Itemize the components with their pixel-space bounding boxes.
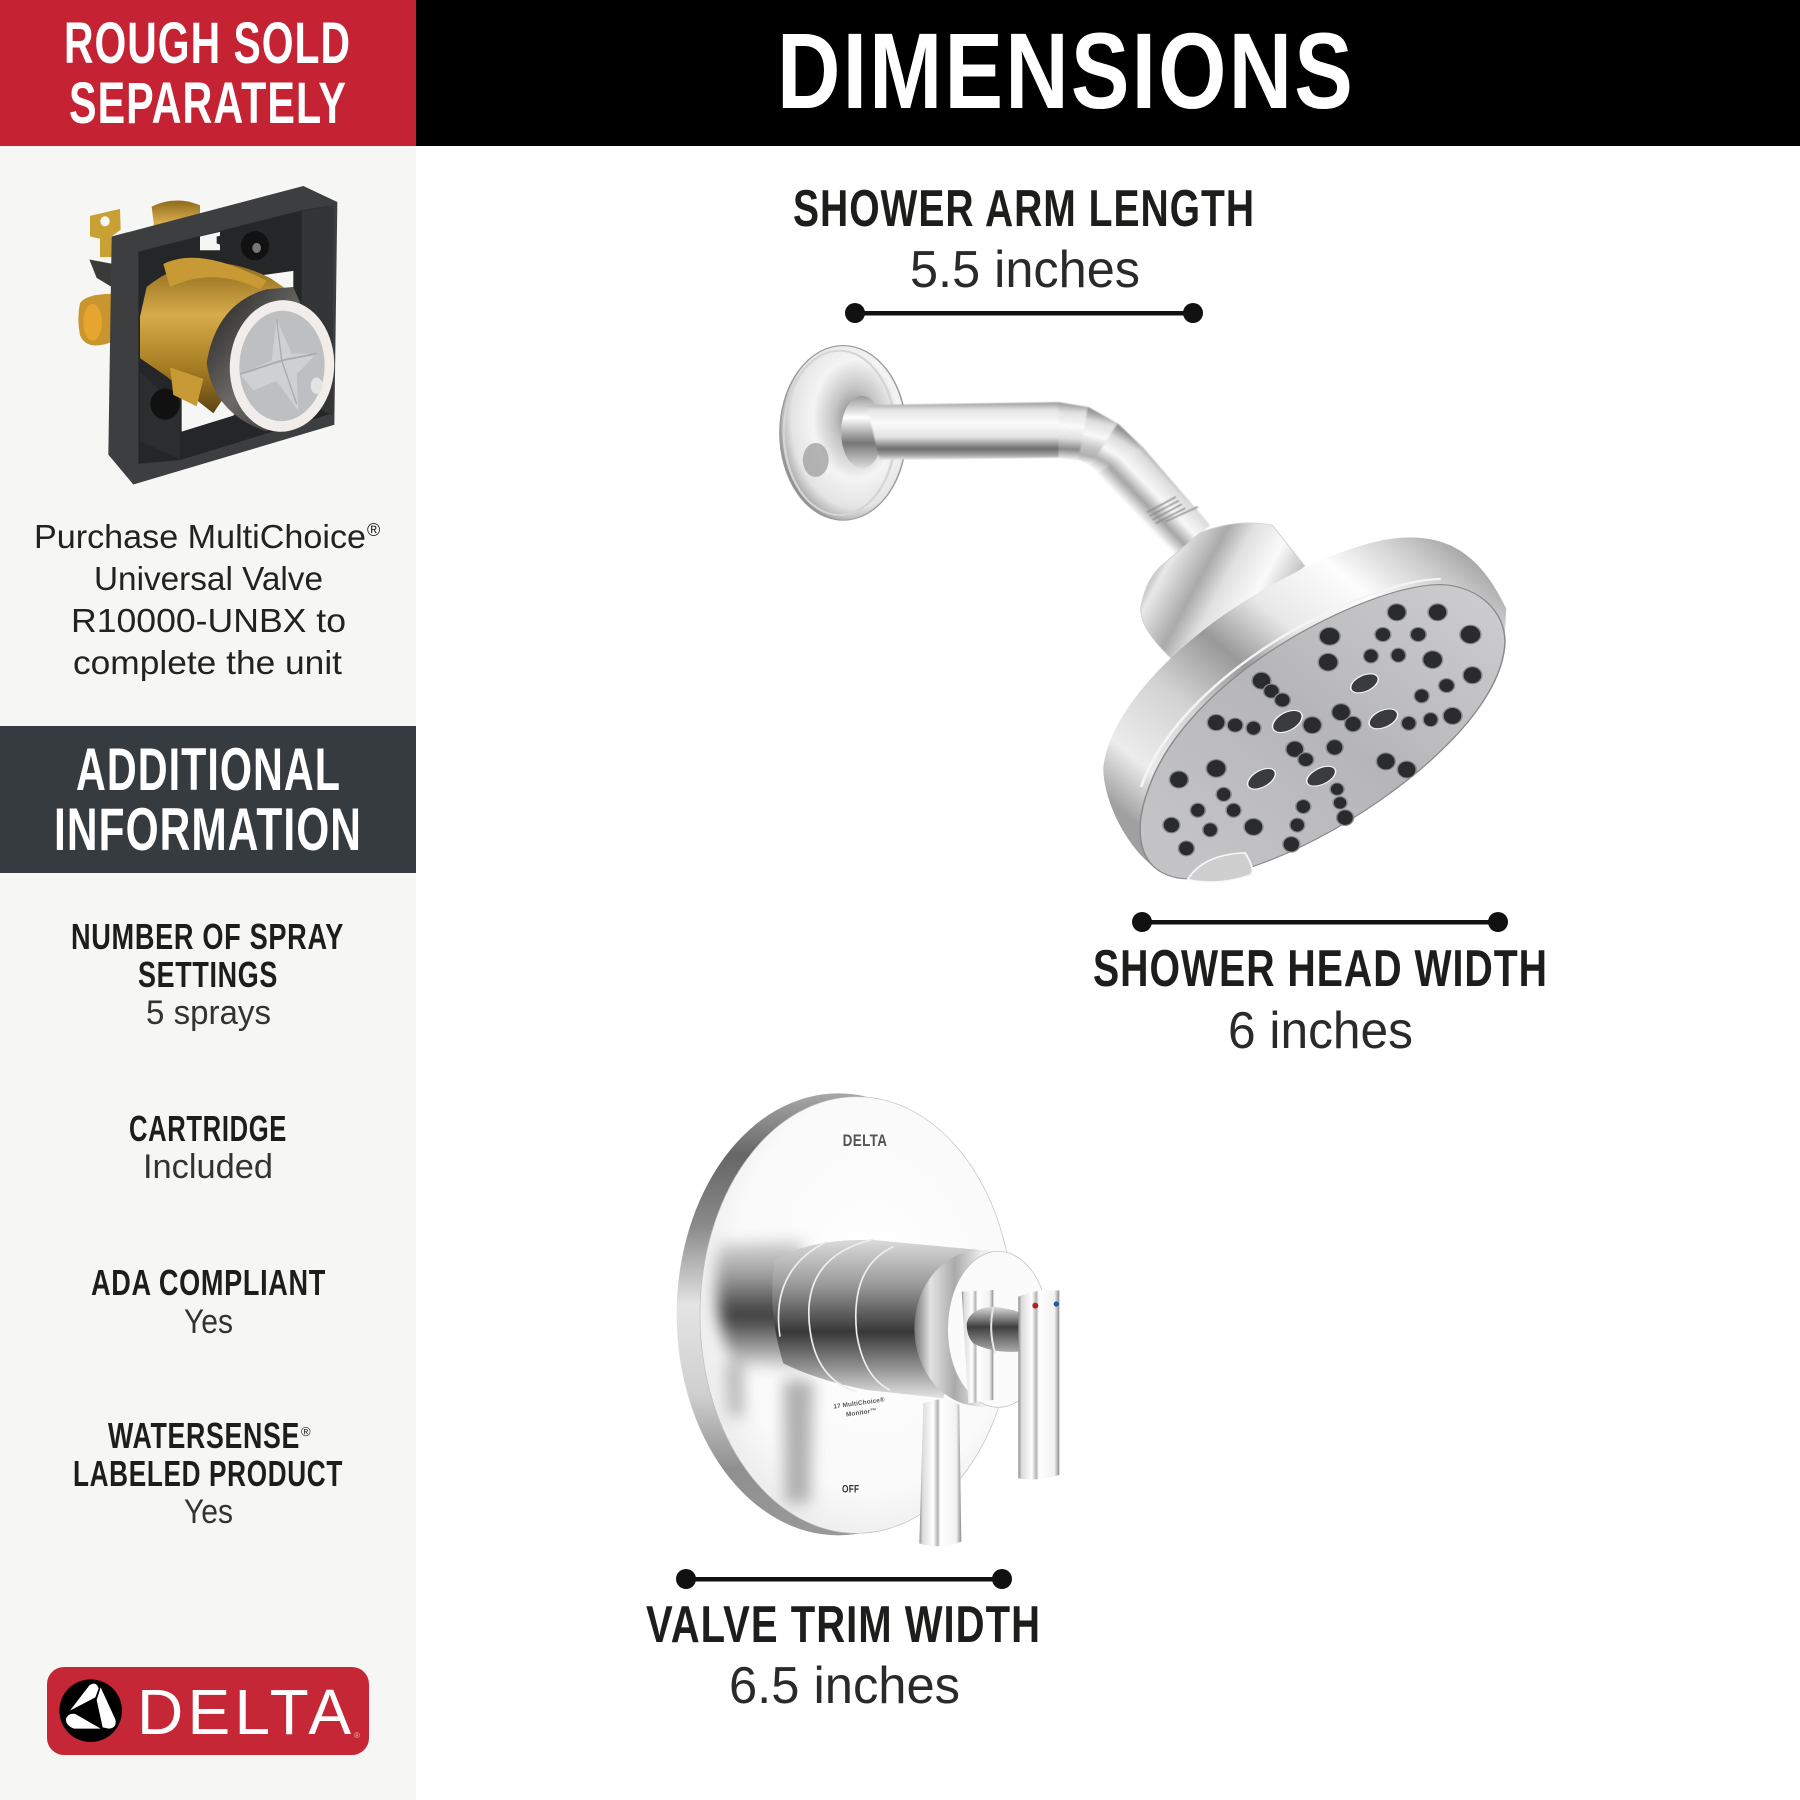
product: shower arm and head	[780, 346, 1506, 882]
label: shower arm length	[793, 180, 1255, 299]
plate text: DELTA	[843, 1131, 887, 1150]
banner: additional information	[0, 726, 416, 873]
label: shower head width: SHOWER HEAD WIDTH	[1093, 940, 1548, 998]
banner: rough sold separately: SEPARATELY	[69, 71, 347, 136]
banner: rough sold separately	[0, 0, 416, 146]
spec: watersense labeled product: ®	[301, 1424, 311, 1439]
spec: watersense labeled product: Yes	[184, 1493, 233, 1531]
spec: number of spray settings: 5 sprays	[146, 994, 271, 1032]
spec: number of spray settings: SETTINGS	[138, 954, 278, 995]
text block: valve purchase note: R10000-UNBX to	[71, 602, 346, 639]
stem and rear bar	[962, 1290, 1020, 1403]
spec: watersense labeled product: WATERSENSE	[108, 1415, 300, 1456]
trim plate rim	[677, 1093, 1000, 1535]
banner: rough sold separately: ROUGH SOLD	[64, 11, 351, 76]
plate reflections	[716, 1240, 813, 1503]
label: valve trim width	[646, 1596, 1041, 1715]
wall flange	[780, 346, 906, 520]
label: shower arm length: SHOWER ARM LENGTH	[793, 180, 1255, 238]
panel: left sidebar background	[0, 0, 416, 1800]
label: valve trim width: 6.5 inches	[729, 1657, 960, 1715]
end cap	[914, 1250, 1049, 1407]
arrow: shower arm length dimension line	[845, 303, 1203, 323]
plate text: OFF	[842, 1484, 859, 1496]
spec: watersense labeled product	[73, 1415, 343, 1531]
head side band	[1103, 538, 1506, 877]
spec: ada compliant: Yes	[184, 1303, 233, 1341]
logo: delta: ®	[354, 1731, 360, 1740]
bottom lever	[919, 1400, 961, 1546]
spray nozzles	[1163, 604, 1482, 856]
valve body cylinder	[772, 1239, 980, 1398]
spec: ada compliant: ADA COMPLIANT	[91, 1262, 326, 1303]
text block: valve purchase note: Purchase MultiChoice	[34, 518, 366, 555]
plate text: 17 MultiChoice®	[833, 1395, 885, 1411]
label: shower arm length: 5.5 inches	[910, 241, 1140, 299]
spec: watersense labeled product: LABELED PRODUCT	[73, 1453, 343, 1494]
text block: valve purchase note	[34, 518, 380, 681]
banner: additional information: INFORMATION	[54, 796, 362, 863]
product: valve trim	[677, 1093, 1059, 1546]
face tab	[1188, 853, 1252, 882]
label: shower head width: 6 inches	[1228, 1002, 1413, 1060]
banner: additional information: ADDITIONAL	[76, 736, 341, 803]
spec: number of spray settings: NUMBER OF SPRAY	[71, 916, 344, 957]
text block: valve purchase note: complete the unit	[73, 644, 342, 681]
spray slots	[1242, 670, 1403, 793]
plate text	[833, 1131, 887, 1496]
spec: cartridge: CARTRIDGE	[129, 1108, 287, 1149]
right lever	[1018, 1290, 1059, 1479]
logo: delta: DELTA	[137, 1676, 351, 1748]
spec: cartridge	[129, 1108, 287, 1186]
face highlight rim	[1141, 579, 1441, 787]
banner: dimensions title: DIMENSIONS	[777, 10, 1355, 131]
text block: valve purchase note: ®	[367, 520, 380, 540]
arrow: shower head width dimension line	[1132, 912, 1508, 932]
curved arm	[867, 402, 1210, 564]
spray face	[1140, 585, 1505, 879]
text block: valve purchase note: Universal Valve	[94, 560, 323, 597]
label: shower head width	[1093, 940, 1548, 1060]
logo: delta	[47, 1667, 369, 1755]
plate text: Monitor™	[846, 1407, 877, 1418]
head neck	[1141, 523, 1305, 662]
label: valve trim width: VALVE TRIM WIDTH	[646, 1596, 1041, 1654]
spec: ada compliant	[91, 1262, 326, 1341]
spec: number of spray settings	[71, 916, 344, 1032]
trim plate face	[700, 1097, 1013, 1533]
icon: rough-in valve photo	[78, 186, 340, 484]
logo mark	[59, 1679, 122, 1742]
banner: dimensions title	[416, 0, 1800, 146]
arrow: valve trim width dimension line	[676, 1569, 1012, 1589]
spec: cartridge: Included	[143, 1148, 273, 1186]
